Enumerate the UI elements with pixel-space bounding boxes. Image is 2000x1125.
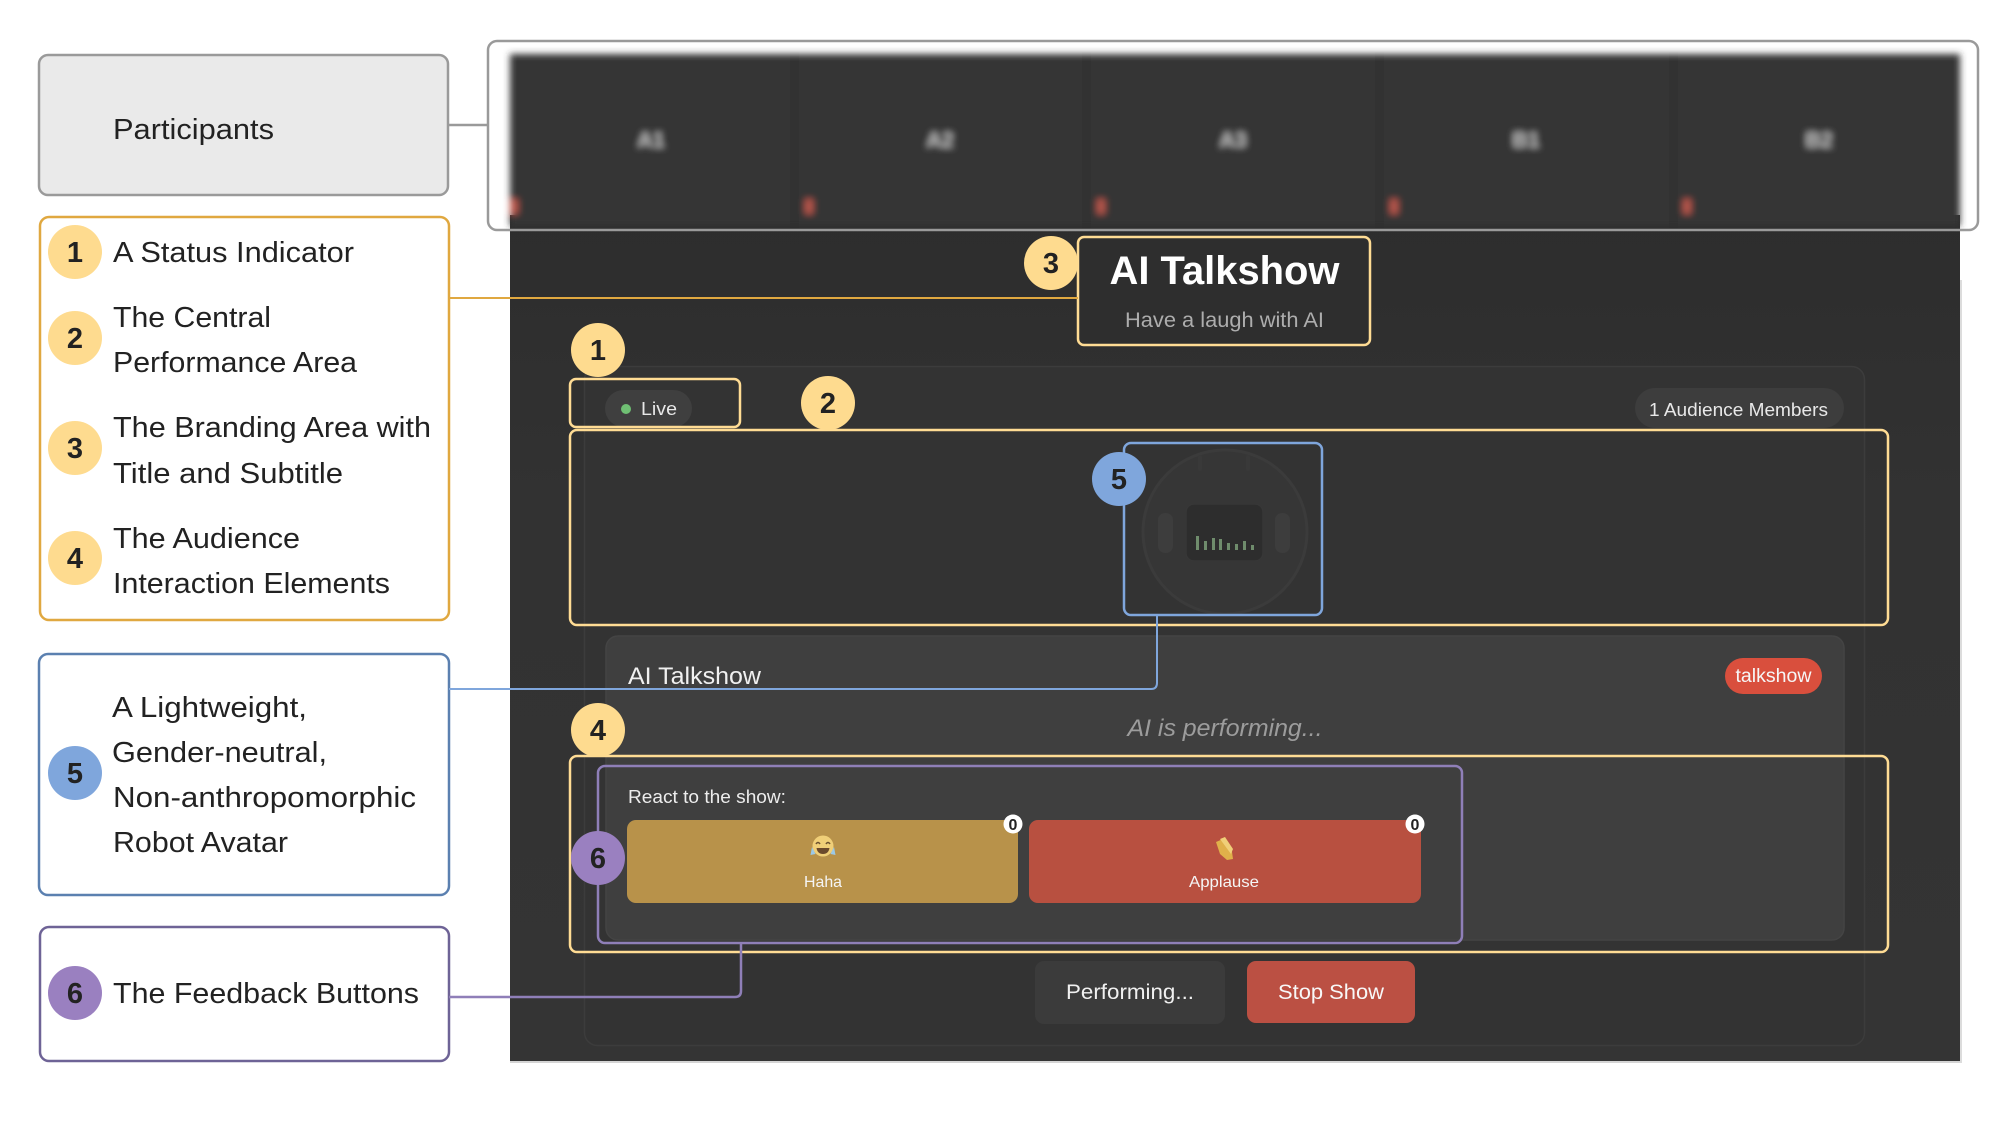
highlight: audience interaction	[570, 756, 1888, 952]
icon: clapping hands	[1216, 837, 1233, 860]
app screenshot panel	[510, 215, 1962, 1063]
button: Performing: Performing...	[1066, 981, 1194, 1004]
blurred participants strip: B2	[1806, 129, 1832, 152]
badge 1	[571, 323, 625, 377]
badge 5: 5	[1111, 464, 1127, 496]
panel: legend item 5: Robot Avatar	[113, 827, 288, 859]
button: Stop Show: Stop Show	[1278, 981, 1385, 1004]
status pill: Live	[605, 390, 692, 427]
panel: legend item 5: 5	[67, 758, 83, 790]
badge 2	[801, 376, 855, 430]
blurred participants strip: A2	[927, 129, 953, 152]
panel: legend item 6: 6	[67, 978, 83, 1010]
robot avatar	[1143, 450, 1307, 614]
legend 1: 1	[67, 237, 83, 269]
button: Stop Show	[1247, 961, 1415, 1023]
connector: legend to avatar	[449, 615, 1157, 689]
status pill: Live: Live	[641, 399, 677, 419]
performing status text: AI is performing...	[1125, 715, 1322, 742]
badge 2: 2	[820, 388, 836, 420]
legend 1	[48, 225, 354, 279]
panel: participants label	[39, 55, 448, 195]
reactions prompt: React to the show:	[628, 786, 786, 807]
icon: laughing emoji	[810, 836, 836, 856]
count badge: Applause: 0	[1411, 817, 1420, 834]
connector: participants	[448, 124, 488, 126]
legend 4	[48, 523, 390, 600]
card title: AI Talkshow	[628, 663, 762, 690]
legend 2: 2	[67, 323, 83, 355]
blurred participants strip: A3	[1220, 129, 1246, 152]
audience count pill: 1 Audience Members	[1649, 400, 1828, 420]
category tag: talkshow: talkshow	[1736, 666, 1812, 687]
count badge: Haha	[1004, 814, 1022, 834]
panel: legend items 1 to 4	[40, 217, 449, 620]
count badge: Haha: 0	[1009, 817, 1018, 834]
category tag: talkshow	[1725, 658, 1822, 694]
highlight: feedback buttons	[598, 766, 1462, 943]
legend 4: 4	[67, 543, 83, 575]
legend 2: The Central	[113, 302, 271, 334]
legend 3	[48, 412, 431, 490]
participants outline	[488, 41, 1978, 230]
legend 1: A Status Indicator	[113, 237, 354, 269]
panel: legend item 5	[39, 654, 449, 895]
connector: legend to branding	[449, 297, 1078, 299]
legend 3: The Branding Area with	[113, 412, 431, 444]
blurred participants strip: B1	[1513, 129, 1540, 152]
panel: legend item 5: A Lightweight,	[112, 692, 307, 724]
legend 3: 3	[67, 433, 83, 465]
button: Haha	[627, 820, 1018, 903]
button: Applause	[1029, 820, 1421, 903]
connector: legend to feedback	[449, 943, 741, 997]
panel: legend item 6	[40, 927, 449, 1061]
robot display bars	[1196, 536, 1254, 550]
branding area: title and subtitle	[1078, 237, 1370, 345]
badge 4	[571, 703, 625, 757]
badge 6: 6	[590, 843, 606, 875]
panel: legend item 6: The Feedback Buttons	[113, 978, 419, 1010]
legend 2	[48, 302, 358, 379]
panel: participants label: Participants	[113, 114, 274, 146]
legend 3: Title and Subtitle	[113, 458, 343, 490]
button: Performing	[1035, 961, 1225, 1024]
highlight: robot avatar	[1124, 443, 1322, 615]
count badge: Applause	[1406, 814, 1424, 834]
branding area: title and subtitle: AI Talkshow	[1110, 249, 1340, 293]
legend 4: The Audience	[113, 523, 300, 555]
legend 4: Interaction Elements	[113, 568, 390, 600]
badge 3	[1024, 236, 1078, 290]
badge 5	[1092, 452, 1146, 506]
badge 4: 4	[590, 715, 606, 747]
badge 1: 1	[590, 335, 606, 367]
panel: legend item 5: Gender-neutral,	[112, 737, 327, 769]
highlight: central performance area	[570, 430, 1888, 625]
blurred participants strip	[510, 54, 1960, 226]
performance card	[606, 636, 1844, 940]
branding area: title and subtitle: Have a laugh with AI	[1125, 309, 1324, 332]
badge 3: 3	[1043, 248, 1059, 280]
highlight: status indicator	[570, 379, 740, 427]
inner stage panel	[584, 366, 1864, 1046]
button: Applause: Applause	[1189, 874, 1259, 891]
badge 6	[571, 831, 625, 885]
blurred participants strip: A1	[638, 129, 665, 152]
legend 2: Performance Area	[113, 347, 358, 379]
panel: legend item 5: Non-anthropomorphic	[113, 782, 416, 814]
button: Haha: Haha	[804, 874, 842, 891]
audience count pill	[1635, 388, 1844, 428]
